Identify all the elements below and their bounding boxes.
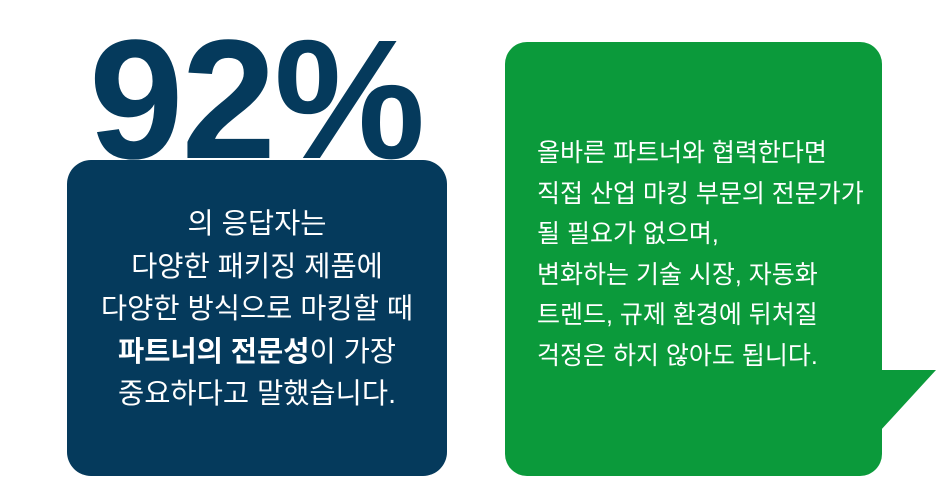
panel: navy statement box: 파트너의 전문성이 가장 [118,336,396,368]
panel: green speech bubble [505,42,882,476]
panel: navy statement box: 중요하다고 말했습니다. [118,378,396,410]
panel: navy statement box [67,160,447,476]
panel: navy statement box: 의 응답자는 [187,208,327,240]
panel: green speech bubble: 걱정은 하지 않아도 됩니다. [537,342,818,370]
panel: green speech bubble: 직접 산업 마킹 부문의 전문가가 [537,180,864,208]
headline stat: 92%: 92% [89,5,423,195]
panel: green speech bubble: 변화하는 기술 시장, 자동화 [537,260,818,288]
panel: green speech bubble: 될 필요가 없으며, [537,220,719,248]
panel: green speech bubble: 트렌드, 규제 환경에 뒤처질 [537,301,818,329]
panel: navy statement box: 다양한 패키징 제품에 [131,250,383,282]
panel: navy statement box: 다양한 방식으로 마킹할 때 [101,293,413,325]
panel: green speech bubble: 올바른 파트너와 협력한다면 [537,139,827,167]
